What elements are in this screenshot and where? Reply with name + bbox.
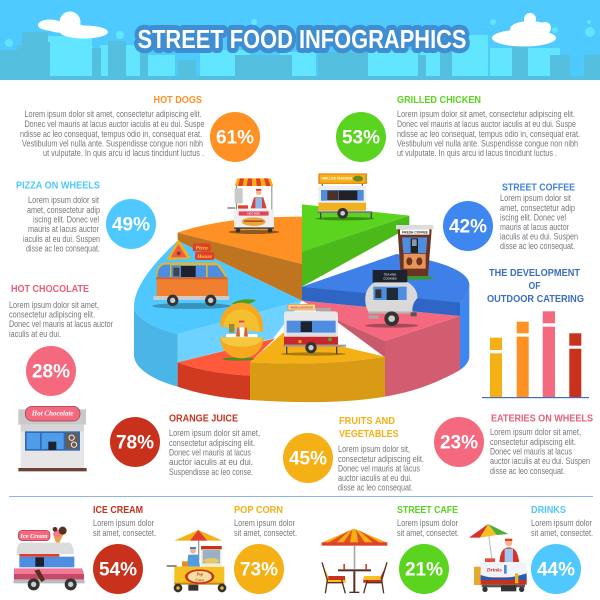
heading: hot chocolate: HOT CHOCOLATE — [11, 283, 89, 295]
icon: eatery trailer — [281, 304, 346, 356]
text block: hot dogs — [20, 109, 205, 158]
percent badge 23% — [434, 417, 484, 467]
icon: tea and cookies trailer: TEA AND — [384, 272, 397, 276]
text block: street coffee — [500, 193, 578, 251]
heading: fruits and vegetables: VEGETABLES — [339, 428, 398, 440]
percent badge 78% — [110, 417, 160, 467]
percent badge 54% — [93, 544, 143, 594]
chart title: OUTDOOR CATERING — [487, 293, 584, 305]
percent badge 21%: 21% — [405, 560, 443, 581]
heading: fruits and vegetables: FRUITS AND — [339, 415, 395, 427]
text block: orange juice: Lorem ipsum dolor sit amet, — [169, 428, 260, 438]
text block: street cafe: Lorem ipsum dolor — [397, 518, 458, 528]
text block: ice cream: Lorem ipsum dolor — [93, 518, 154, 528]
bars — [482, 311, 589, 398]
text block: hot chocolate: consectetur adipiscing elit. — [9, 310, 95, 320]
header banner with city skyline — [0, 0, 600, 80]
icon: pop corn cart: Corn — [195, 577, 205, 582]
icon: pizza van: Pizza — [196, 245, 208, 251]
text block: fruits and vegetables: consectetur adipiscing elit. — [338, 454, 424, 464]
icon: hot dog cart — [227, 178, 279, 234]
icon: ice cream van — [13, 527, 85, 590]
text block: hot dogs: Lorem ipsum dolor sit amet, consectetur adipiscing elit. — [24, 109, 202, 119]
panel: fruits and vegetables — [283, 415, 424, 492]
text block: pizza on wheels: disse ac leo consequat. — [26, 244, 100, 254]
text block: street coffee: Lorem ipsum dolor sit — [500, 193, 571, 203]
icon: grilled chicken truck — [316, 173, 374, 220]
panel: pop corn — [167, 504, 297, 594]
heading: hot dogs: HOT DOGS — [154, 94, 202, 106]
icon: pop corn cart: Pop — [196, 572, 203, 577]
percent badge 61% — [210, 112, 260, 162]
text block: orange juice: Suspendisse ac leo conse. — [169, 467, 253, 477]
text block: hot chocolate: Donec vel mauris at lacus auctor — [9, 319, 113, 329]
heading: orange juice: ORANGE JUICE — [169, 413, 238, 425]
icon: pizza van — [152, 239, 231, 309]
text block: pizza on wheels — [23, 195, 100, 254]
percent badge 45%: 45% — [289, 449, 327, 470]
heading: pop corn: POP CORN — [234, 504, 283, 516]
panel: drinks — [469, 504, 593, 594]
heading: grilled chicken: GRILLED CHICKEN — [397, 94, 481, 106]
text block: pizza on wheels: iaculis at eu dui. Suspen — [23, 234, 100, 244]
panel: grilled chicken — [336, 94, 580, 162]
text block: hot dogs: ut vulputate. In quis arcu id lacus tincidunt luctus . — [43, 148, 204, 158]
percent badge 73%: 73% — [240, 560, 278, 581]
panel: pizza on wheels — [16, 180, 156, 254]
text block: orange juice: Donec vel mauris at lacus — [169, 448, 251, 458]
heading: ice cream: ICE CREAM — [93, 504, 143, 516]
percent badge 45% — [283, 433, 333, 483]
percent badge 54%: 54% — [99, 560, 137, 581]
panel: ice cream — [13, 504, 156, 594]
text block: fruits and vegetables: Lorem ipsum dolor sit, — [338, 444, 410, 454]
text block: hot dogs: ndisse ac leo consequat, tempus odio in, consequat erat. — [20, 129, 202, 139]
text block: street coffee: mauris at lacus auctor — [500, 222, 569, 232]
panel: hot chocolate — [9, 283, 113, 396]
heading: drinks: DRINKS — [531, 504, 566, 516]
percent badge 28%: 28% — [32, 362, 70, 383]
heading: pizza on wheels: PIZZA ON WHEELS — [16, 180, 100, 192]
icon: hot dog cart: HOT DOG — [247, 212, 260, 216]
icon: cafe table and umbrella — [322, 529, 387, 593]
icon: tea and cookies trailer: COOKIES — [383, 277, 397, 281]
percent badge 53%: 53% — [342, 128, 380, 149]
chart title: OF — [528, 280, 541, 292]
chart title: THE DEVELOPMENT — [489, 267, 581, 279]
icon: grilled chicken truck: GRILLED CHICKEN — [321, 177, 353, 181]
text block: hot chocolate — [9, 300, 113, 339]
text block: ice cream: sit amet, consectet. — [93, 528, 156, 538]
text block: grilled chicken: ut vulputate. In quis arcu id lacus tincidunt luctus . — [397, 148, 557, 158]
icon: street coffee stand — [396, 225, 434, 280]
heading: street cafe: STREET CAFE — [397, 504, 458, 516]
text block: hot chocolate: iaculis at eu dui. — [9, 329, 61, 339]
heading: fruits and vegetables — [339, 415, 398, 440]
icon: tea and cookies trailer — [365, 270, 418, 328]
icon: ice cream van: Ice Cream — [19, 533, 48, 540]
text block: drinks — [531, 518, 593, 538]
text block: pop corn: Lorem ipsum dolor — [234, 518, 295, 528]
text block: grilled chicken — [397, 109, 580, 158]
text block: pop corn — [234, 518, 297, 538]
text block: orange juice — [169, 428, 260, 477]
icon: street coffee stand: FRESH COFFEE — [402, 230, 429, 234]
icon: hot chocolate kiosk — [18, 406, 87, 471]
icon: pop corn cart — [167, 530, 226, 592]
text block: street coffee: iaculis at eu dui. Suspen — [500, 232, 578, 242]
percent badge 53% — [336, 112, 386, 162]
text block: pop corn: sit amet, consectet. — [234, 528, 297, 538]
text block: pizza on wheels: mauris at lacus auctor — [28, 224, 99, 234]
text block: orange juice: auctor iaculis at eu dui. — [169, 457, 253, 467]
chart: the development of outdoor catering — [482, 267, 589, 398]
panel: street coffee — [443, 182, 578, 251]
text block: eateries on wheels — [490, 427, 590, 476]
text block: fruits and vegetables: Donec vel mauris at lacus — [338, 464, 420, 474]
text block: eateries on wheels: Donec vel mauris at lacus — [490, 446, 572, 456]
text block: fruits and vegetables: auctor iaculis at eu dui. — [338, 473, 412, 483]
panel: orange juice — [110, 413, 260, 477]
icon: drinks cart: Drinks — [486, 568, 502, 574]
panel: eateries on wheels — [434, 413, 593, 476]
text block: street coffee: amet, consectetur adip — [500, 203, 575, 213]
text block: hot chocolate: Lorem ipsum dolor sit amet, — [9, 300, 99, 310]
percent badge 42%: 42% — [449, 217, 487, 238]
text block: hot dogs: Donec vel mauris at lacus auctor iaculis at eu dui. Suspe — [24, 119, 205, 129]
text block: pizza on wheels: amet, consectetur adip — [27, 205, 100, 215]
text block: eateries on wheels: consectetur adipiscing elit. — [490, 437, 576, 447]
icon: pizza van: House — [196, 254, 213, 260]
panel: hot dogs — [20, 94, 260, 162]
chart title — [487, 267, 584, 305]
text block: orange juice: consectetur adipiscing elit. — [169, 438, 255, 448]
percent badge 23%: 23% — [440, 433, 478, 454]
heading: street coffee: STREET COFFEE — [502, 182, 575, 194]
text block: pizza on wheels: Lorem ipsum dolor sit — [28, 195, 99, 205]
icon: orange juice stand — [220, 299, 263, 361]
panel: street cafe — [322, 504, 459, 594]
text block: street cafe — [397, 518, 459, 538]
text block: ice cream — [93, 518, 156, 538]
text block: street coffee: disse ac leo consequat. — [500, 241, 575, 251]
icon: eatery trailer: WORLD BURGER — [291, 305, 313, 309]
title: STREET FOOD INFOGRAPHICS — [138, 24, 466, 54]
text block: fruits and vegetables — [338, 444, 424, 492]
text block: fruits and vegetables: disse ac leo consequat. — [338, 482, 413, 492]
3D stepped pie chart — [134, 204, 469, 402]
text block: hot dogs: Vestibulum vel nulla ante. Suspendisse congue non nibh — [22, 138, 203, 148]
percent badge 44%: 44% — [537, 560, 575, 581]
percent badge 49%: 49% — [112, 215, 150, 236]
icon: hot chocolate kiosk: Hot Chocolate — [31, 410, 74, 418]
text block: pizza on wheels: iscing elit. Donec vel — [33, 214, 99, 224]
text block: eateries on wheels: Lorem ipsum dolor sit amet, — [490, 427, 581, 437]
text block: street coffee: iscing elit. Donec vel — [500, 212, 566, 222]
percent badge 78%: 78% — [116, 433, 154, 454]
text block: eateries on wheels: disse ac leo consequat. — [490, 466, 565, 476]
percent badge 61%: 61% — [216, 128, 254, 149]
text block: street cafe: sit amet, consectet. — [397, 528, 459, 538]
